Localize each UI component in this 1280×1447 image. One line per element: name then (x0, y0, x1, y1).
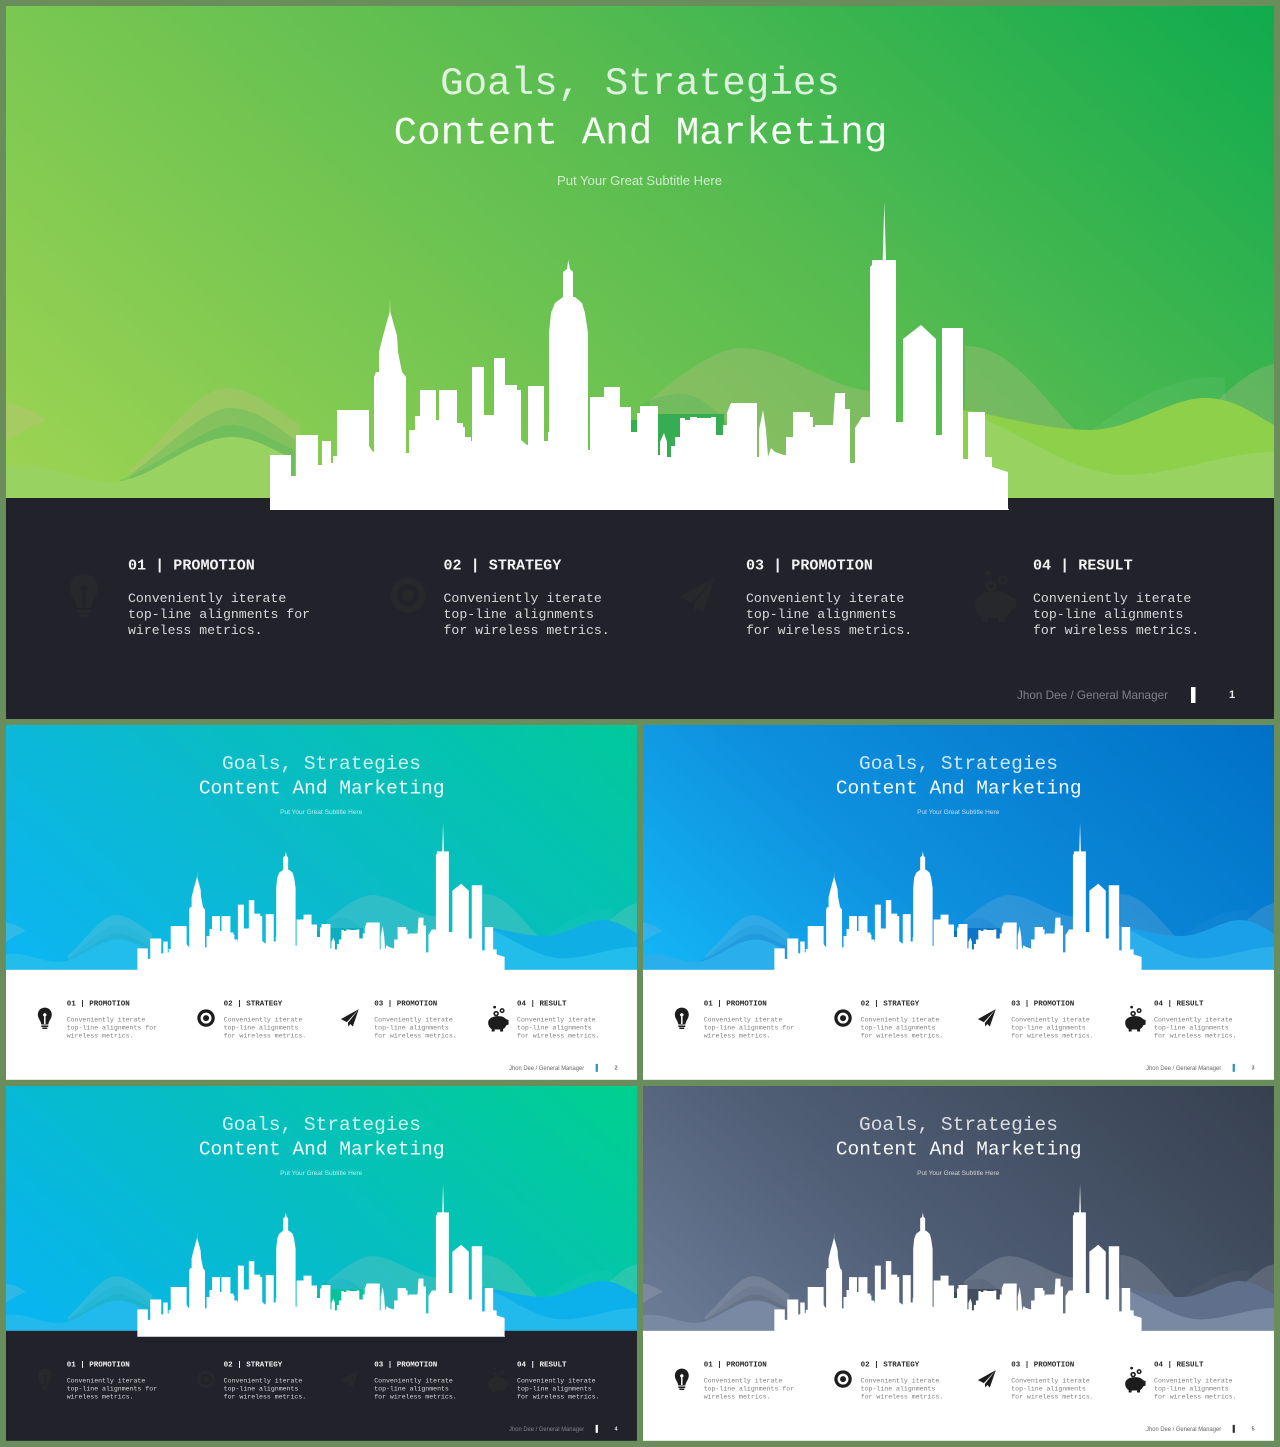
info panel (6, 1331, 637, 1441)
description: top-line alignments (1154, 1386, 1229, 1393)
heading: 04 | RESULT (1033, 556, 1133, 574)
description: for wireless metrics. (224, 1032, 306, 1039)
description: wireless metrics. (67, 1393, 134, 1400)
description: for wireless metrics. (1011, 1393, 1094, 1400)
column 2 (834, 1361, 943, 1400)
description: Conveniently iterate (67, 1017, 145, 1024)
footer: Jhon Dee / General Manager (1017, 688, 1168, 702)
description: top-line alignments (1011, 1025, 1086, 1032)
footer: 3 (1252, 1065, 1255, 1071)
column 3 (978, 1000, 1094, 1039)
icon: paper plane (978, 1370, 996, 1388)
title: Goals, Strategies (859, 1114, 1058, 1136)
heading: 04 | RESULT (517, 1361, 567, 1369)
column 1 (38, 1000, 157, 1039)
description: for wireless metrics. (746, 623, 912, 638)
subtitle: Put Your Great Subtitle Here (917, 809, 1000, 816)
info panel (643, 1331, 1274, 1441)
slide 3: blue white-panel slide (643, 725, 1274, 1080)
description: top-line alignments (224, 1025, 298, 1032)
icon: target (834, 1009, 852, 1027)
description: Conveniently iterate (1011, 1378, 1090, 1385)
description: for wireless metrics. (517, 1393, 600, 1400)
footer: 2 (615, 1065, 618, 1071)
slide 1: large green dark-panel slide (6, 6, 1274, 719)
footer (1017, 687, 1235, 703)
slide 4: teal-green dark-panel slide (6, 1086, 637, 1441)
description: top-line alignments (746, 607, 896, 622)
slide 2: teal-blue white-panel slide (6, 725, 637, 1080)
column 4 (1125, 1361, 1237, 1400)
icon: paper plane (978, 1009, 996, 1027)
skyline (270, 202, 1009, 510)
description: Conveniently iterate (224, 1017, 302, 1024)
description: top-line alignments for (704, 1386, 794, 1393)
column 4 (488, 1000, 600, 1039)
info panel (643, 970, 1274, 1080)
description: top-line alignments (1033, 607, 1183, 622)
description: for wireless metrics. (224, 1393, 306, 1400)
column 4 (975, 556, 1199, 638)
column 1 (675, 1000, 794, 1039)
description: top-line alignments (861, 1025, 935, 1032)
icon: light bulb (38, 1008, 52, 1029)
waves (6, 894, 637, 970)
description: wireless metrics. (704, 1393, 771, 1400)
description: top-line alignments (1011, 1386, 1086, 1393)
description: top-line alignments (861, 1386, 935, 1393)
description: for wireless metrics. (1154, 1032, 1237, 1039)
description: for wireless metrics. (1154, 1393, 1237, 1400)
column 3 (679, 556, 912, 638)
description: top-line alignments (374, 1025, 449, 1032)
icon: target (390, 578, 426, 612)
sky background (6, 1086, 637, 1331)
skyline (774, 823, 1142, 976)
column 1 (38, 1361, 157, 1400)
description: Conveniently iterate (1154, 1378, 1233, 1385)
description: for wireless metrics. (374, 1393, 457, 1400)
footer: 1 (1229, 689, 1235, 701)
title: Goals, Strategies (222, 753, 421, 775)
skyline (137, 823, 505, 976)
skyline (774, 1184, 1142, 1337)
description: Conveniently iterate (67, 1378, 145, 1385)
footer: Jhon Dee / General Manager (509, 1427, 584, 1433)
title (199, 753, 445, 799)
heading: 01 | PROMOTION (704, 1000, 767, 1008)
description: Conveniently iterate (1154, 1017, 1233, 1024)
slide 5: slate white-panel slide (643, 1086, 1274, 1441)
waves (6, 1255, 637, 1331)
description: for wireless metrics. (517, 1032, 600, 1039)
heading: 04 | RESULT (517, 1000, 567, 1008)
column 4 (488, 1361, 600, 1400)
description: Conveniently iterate (374, 1017, 453, 1024)
column 2 (390, 556, 610, 638)
footer: 4 (615, 1426, 619, 1432)
description: for wireless metrics. (374, 1032, 457, 1039)
description: top-line alignments (1154, 1025, 1229, 1032)
icon: target (834, 1370, 852, 1388)
description: top-line alignments for (704, 1025, 794, 1032)
description: for wireless metrics. (1011, 1032, 1094, 1039)
heading: 01 | PROMOTION (704, 1361, 767, 1369)
footer: Jhon Dee / General Manager (509, 1066, 584, 1072)
title: Content And Marketing (199, 1138, 445, 1160)
info panel (6, 498, 1274, 719)
description: for wireless metrics. (1033, 623, 1199, 638)
column 3 (978, 1361, 1094, 1400)
subtitle: Put Your Great Subtitle Here (280, 809, 363, 816)
description: Conveniently iterate (444, 591, 602, 606)
footer (1146, 1064, 1255, 1072)
description: Conveniently iterate (517, 1378, 596, 1385)
skyline (137, 1184, 505, 1337)
footer: Jhon Dee / General Manager (1146, 1427, 1221, 1433)
column 2 (834, 1000, 943, 1039)
sky background (6, 725, 637, 970)
title (199, 1114, 445, 1160)
heading: 01 | PROMOTION (67, 1000, 130, 1008)
title: Content And Marketing (836, 1138, 1082, 1160)
description: for wireless metrics. (444, 623, 610, 638)
icon: paper plane (341, 1370, 359, 1388)
sky background (6, 6, 1274, 498)
waves (643, 894, 1274, 970)
description: top-line alignments for (128, 607, 310, 622)
icon: piggy bank (1125, 1006, 1146, 1032)
sky background (643, 725, 1274, 970)
heading: 02 | STRATEGY (224, 1361, 283, 1369)
description: Conveniently iterate (374, 1378, 453, 1385)
footer: 5 (1252, 1426, 1255, 1432)
heading: 03 | PROMOTION (746, 556, 873, 574)
description: Conveniently iterate (1033, 591, 1191, 606)
column 2 (197, 1000, 306, 1039)
footer (509, 1064, 618, 1072)
description: Conveniently iterate (746, 591, 904, 606)
waves (6, 346, 1274, 498)
icon: paper plane (341, 1009, 359, 1027)
heading: 04 | RESULT (1154, 1000, 1204, 1008)
footer (509, 1425, 619, 1433)
description: top-line alignments (374, 1386, 449, 1393)
footer: Jhon Dee / General Manager (1146, 1066, 1221, 1072)
description: wireless metrics. (704, 1032, 771, 1039)
description: top-line alignments for (67, 1025, 157, 1032)
title: Content And Marketing (836, 777, 1082, 799)
title: Goals, Strategies (222, 1114, 421, 1136)
description: Conveniently iterate (1011, 1017, 1090, 1024)
subtitle: Put Your Great Subtitle Here (557, 173, 722, 188)
heading: 04 | RESULT (1154, 1361, 1204, 1369)
column 1 (70, 556, 310, 638)
heading: 01 | PROMOTION (128, 556, 255, 574)
heading: 03 | PROMOTION (374, 1000, 437, 1008)
icon: light bulb (675, 1369, 689, 1390)
footer (1146, 1425, 1255, 1433)
icon: target (197, 1009, 215, 1027)
heading: 02 | STRATEGY (861, 1000, 920, 1008)
icon: light bulb (38, 1369, 52, 1390)
icon: piggy bank (1125, 1367, 1146, 1393)
icon: piggy bank (488, 1367, 509, 1393)
icon: piggy bank (488, 1006, 509, 1032)
description: Conveniently iterate (861, 1378, 939, 1385)
title (836, 1114, 1082, 1160)
title: Content And Marketing (199, 777, 445, 799)
column 2 (197, 1361, 306, 1400)
column 4 (1125, 1000, 1237, 1039)
icon: piggy bank (975, 570, 1016, 622)
icon: light bulb (70, 574, 98, 617)
subtitle: Put Your Great Subtitle Here (917, 1170, 1000, 1177)
description: wireless metrics. (128, 623, 263, 638)
description: for wireless metrics. (861, 1393, 943, 1400)
description: Conveniently iterate (704, 1017, 782, 1024)
description: Conveniently iterate (861, 1017, 939, 1024)
heading: 02 | STRATEGY (444, 556, 562, 574)
title (836, 753, 1082, 799)
heading: 03 | PROMOTION (1011, 1361, 1074, 1369)
waves (643, 1255, 1274, 1331)
title: Goals, Strategies (440, 61, 840, 106)
heading: 01 | PROMOTION (67, 1361, 130, 1369)
title (394, 61, 887, 156)
icon: light bulb (675, 1008, 689, 1029)
column 3 (341, 1000, 457, 1039)
description: top-line alignments (444, 607, 594, 622)
icon: target (197, 1370, 215, 1388)
description: Conveniently iterate (128, 591, 286, 606)
description: Conveniently iterate (704, 1378, 782, 1385)
sky background (643, 1086, 1274, 1331)
description: for wireless metrics. (861, 1032, 943, 1039)
subtitle: Put Your Great Subtitle Here (280, 1170, 363, 1177)
icon: paper plane (679, 577, 715, 612)
description: top-line alignments (517, 1386, 592, 1393)
description: wireless metrics. (67, 1032, 134, 1039)
description: Conveniently iterate (517, 1017, 596, 1024)
heading: 03 | PROMOTION (1011, 1000, 1074, 1008)
heading: 02 | STRATEGY (224, 1000, 283, 1008)
title: Goals, Strategies (859, 753, 1058, 775)
heading: 03 | PROMOTION (374, 1361, 437, 1369)
description: top-line alignments for (67, 1386, 157, 1393)
description: top-line alignments (517, 1025, 592, 1032)
heading: 02 | STRATEGY (861, 1361, 920, 1369)
column 1 (675, 1361, 794, 1400)
info panel (6, 970, 637, 1080)
column 3 (341, 1361, 457, 1400)
title: Content And Marketing (394, 110, 887, 156)
description: top-line alignments (224, 1386, 298, 1393)
description: Conveniently iterate (224, 1378, 302, 1385)
